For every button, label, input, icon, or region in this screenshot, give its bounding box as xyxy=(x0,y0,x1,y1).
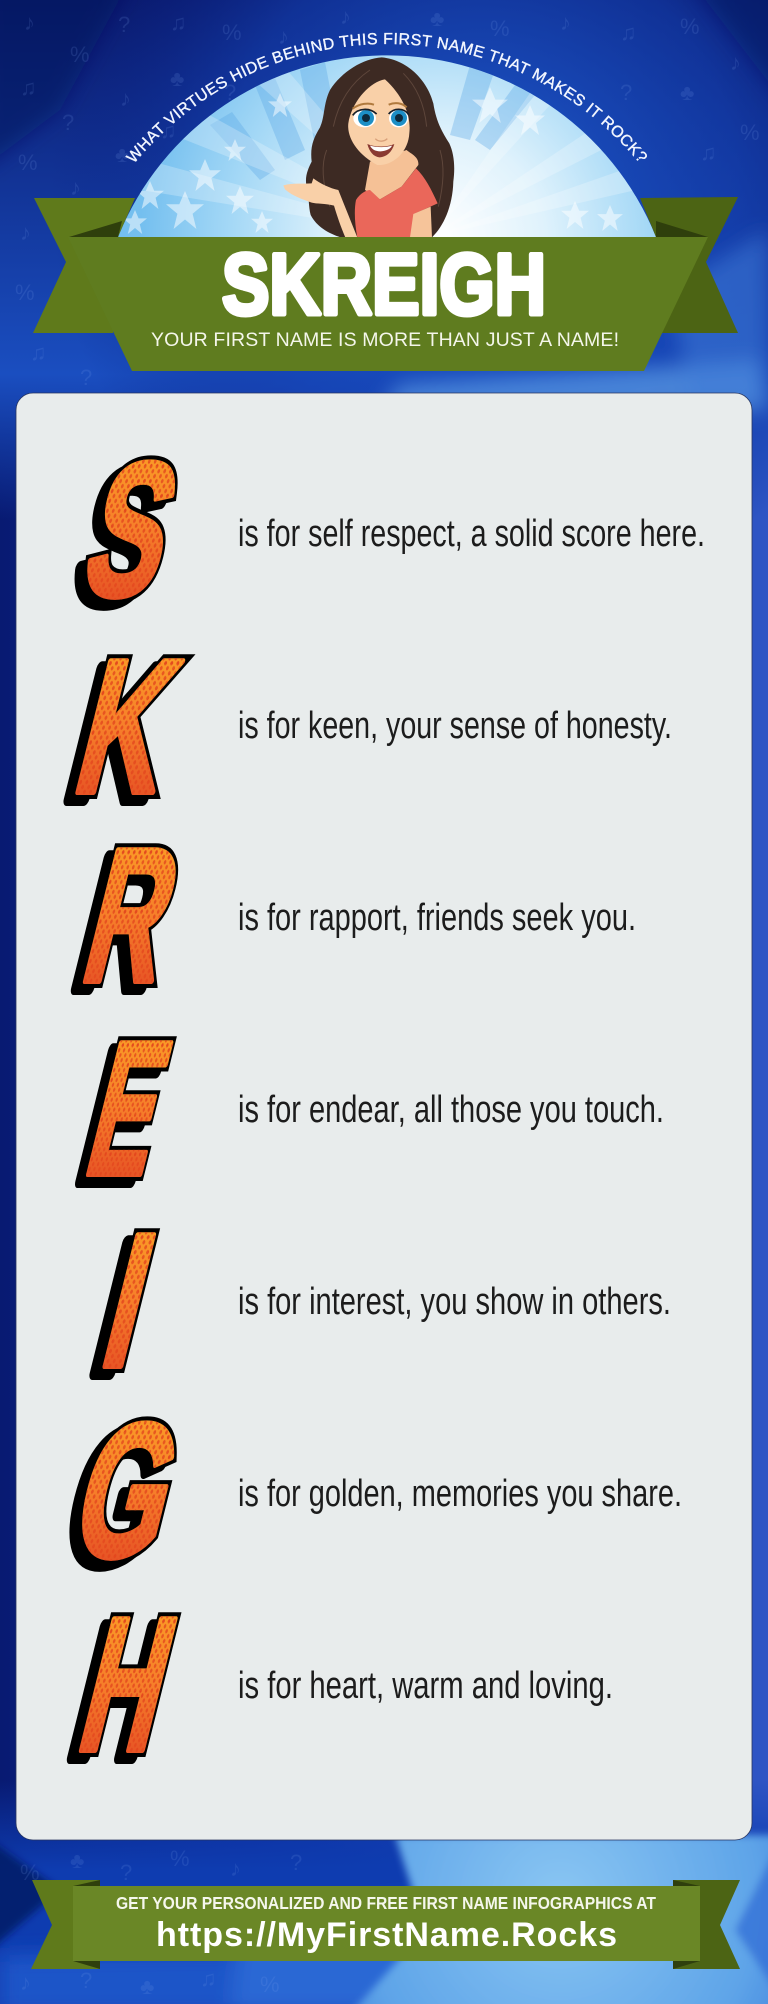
background icon pattern: % xyxy=(680,14,700,39)
background icon pattern: % xyxy=(260,1972,280,1997)
footer front xyxy=(73,1886,700,1961)
letter H: H xyxy=(63,1579,193,1791)
right arm xyxy=(410,207,432,237)
footer call to action: GET YOUR PERSONALIZED AND FREE FIRST NAME INFOGRAPHICS AT xyxy=(116,1893,656,1913)
background icon pattern: ? xyxy=(620,80,632,105)
letter E: E xyxy=(62,1009,179,1222)
hair xyxy=(306,57,454,237)
letter S: S xyxy=(68,423,197,635)
letter I: I xyxy=(86,1196,172,1407)
letter H: H xyxy=(63,1579,193,1791)
letter E: E xyxy=(71,1002,187,1215)
stars xyxy=(123,87,623,234)
curved tagline: WHAT VIRTUES HIDE BEHIND THIS FIRST NAME THAT MAKES IT ROCK? xyxy=(125,32,647,162)
ribbon left tail xyxy=(33,198,135,333)
letter I: I xyxy=(76,1203,161,1414)
ribbon right tail xyxy=(640,197,738,333)
background icon pattern: ♫ xyxy=(160,118,176,143)
background icon pattern: ♫ xyxy=(200,1966,216,1991)
background icon pattern: % xyxy=(222,20,242,45)
eyebrows xyxy=(353,103,407,109)
background icon pattern: ♪ xyxy=(70,175,81,200)
letter I: I xyxy=(86,1196,172,1407)
background icon pattern: ♪ xyxy=(340,4,351,29)
background icon pattern: ♫ xyxy=(20,75,36,100)
background icon pattern: ? xyxy=(80,365,92,390)
letter K: K xyxy=(59,622,197,833)
letter G: G xyxy=(58,1384,199,1596)
letter E: E xyxy=(71,1002,187,1215)
eyes xyxy=(353,109,409,127)
letter I: I xyxy=(86,1196,172,1407)
footer folds xyxy=(73,1880,700,1969)
footer left tail xyxy=(31,1880,100,1969)
background icon pattern: ♫ xyxy=(700,140,716,165)
nose xyxy=(375,139,387,141)
letter R: R xyxy=(67,810,197,1022)
background icon pattern: ♪ xyxy=(730,50,741,75)
starburst rays xyxy=(142,72,632,218)
letter S: S xyxy=(58,430,187,642)
background icon pattern: % xyxy=(70,42,90,67)
background icon pattern: ♫ xyxy=(30,340,46,365)
footer right tail xyxy=(673,1880,740,1969)
subtitle: YOUR FIRST NAME IS MORE THAN JUST A NAME! xyxy=(151,329,619,351)
letter H: H xyxy=(63,1579,193,1791)
name title: SKREIGH xyxy=(222,237,546,333)
background icon pattern: % xyxy=(170,1846,190,1871)
header ribbon xyxy=(33,197,738,371)
background icon pattern: % xyxy=(18,150,38,175)
character: woman with brown hair xyxy=(283,57,454,237)
letter K: K xyxy=(59,622,197,833)
background icon pattern: ♣ xyxy=(115,142,129,167)
footer url: https://MyFirstName.Rocks xyxy=(156,1916,617,1954)
ribbon right fold xyxy=(656,221,708,237)
line: H: is for heart, warm and loving. xyxy=(238,1665,613,1707)
letter R: R xyxy=(67,810,197,1022)
face xyxy=(348,79,410,165)
background icon pattern: ? xyxy=(120,1860,132,1885)
letter S: S xyxy=(68,423,197,635)
letter R: R xyxy=(67,810,197,1022)
ribbon front xyxy=(68,237,708,371)
letter S: S xyxy=(68,423,197,635)
letter G: G xyxy=(58,1384,199,1596)
footer ribbon xyxy=(31,1880,740,1969)
ribbon left fold xyxy=(69,221,122,237)
letter H: H xyxy=(54,1586,184,1798)
background icon pattern: ♪ xyxy=(120,86,131,111)
darker rays near the top of the dome xyxy=(210,62,535,180)
main panel xyxy=(16,393,752,1840)
background icon pattern: % xyxy=(15,280,35,305)
background icon pattern: ♪ xyxy=(24,10,35,35)
letter G: G xyxy=(58,1384,199,1596)
letter E: E xyxy=(71,1002,187,1215)
background icon pattern: ? xyxy=(62,110,74,135)
line: R: is for rapport, friends seek you. xyxy=(238,897,636,939)
background icon pattern: ♪ xyxy=(560,10,571,35)
background icon pattern: % xyxy=(740,120,760,145)
background icon pattern: ♪ xyxy=(20,1970,31,1995)
shirt xyxy=(355,168,438,237)
background icon pattern: ♣ xyxy=(70,1848,84,1873)
background icon pattern: ? xyxy=(224,80,236,105)
mouth xyxy=(367,144,394,157)
background icon pattern: ♪ xyxy=(278,24,289,49)
background icon pattern: % xyxy=(490,16,510,41)
background icon pattern: ♣ xyxy=(170,66,184,91)
hair highlights xyxy=(323,70,443,207)
background icon pattern: ♣ xyxy=(140,1974,154,1999)
background icon pattern: ♫ xyxy=(620,20,636,45)
background icon pattern: ? xyxy=(290,1850,302,1875)
letter K: K xyxy=(50,629,188,840)
raised hand and arm xyxy=(283,178,357,237)
background icon pattern: ♣ xyxy=(430,6,444,31)
background icon pattern: ♪ xyxy=(20,220,31,245)
background icon pattern: ? xyxy=(80,1968,92,1993)
background icon pattern: ♣ xyxy=(680,80,694,105)
neck xyxy=(365,150,418,199)
letter R: R xyxy=(58,817,188,1029)
background icon pattern: ♫ xyxy=(170,10,186,35)
letter K: K xyxy=(59,622,197,833)
letter G: G xyxy=(47,1391,189,1603)
background icon pattern: ? xyxy=(118,12,130,37)
background icon pattern: % xyxy=(20,1860,40,1885)
header dome with starburst xyxy=(110,50,680,240)
background icon pattern: ♪ xyxy=(230,1856,241,1881)
